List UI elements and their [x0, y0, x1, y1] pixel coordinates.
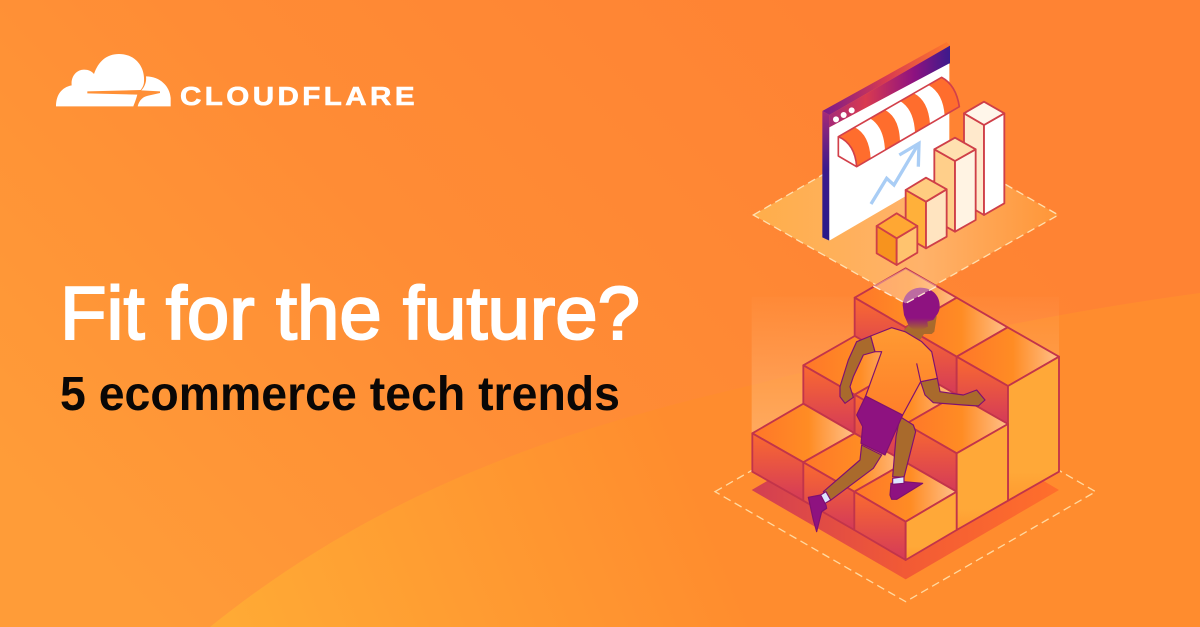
- dashed platform: [753, 127, 1058, 302]
- rear leg: [823, 445, 882, 501]
- illustration: staircase with runner: [715, 268, 1096, 602]
- bar 2: [906, 178, 947, 248]
- bar chart: [877, 102, 1004, 265]
- right arm: [921, 378, 985, 406]
- shirt: [866, 328, 937, 415]
- awning: [838, 77, 959, 167]
- shorts: [857, 396, 903, 455]
- illustration: storefront platform: [753, 42, 1058, 302]
- bar 3: [934, 138, 976, 232]
- socks: [821, 477, 904, 503]
- logo: Cloudflare: [56, 54, 418, 111]
- hair: [903, 288, 940, 330]
- left arm: [840, 336, 875, 403]
- title: Fit for the future?: [60, 271, 640, 355]
- glass tile: [873, 268, 937, 303]
- icon: cloud: [56, 54, 171, 106]
- shoes: [808, 482, 923, 532]
- dashed ground outline: [715, 382, 1096, 602]
- face: [903, 303, 937, 340]
- light beam: [752, 297, 1059, 437]
- stairs: [752, 268, 1059, 560]
- browser window: [822, 42, 950, 241]
- bar 1: [877, 213, 917, 265]
- ground shadow: [752, 400, 1059, 579]
- subtitle: 5 ecommerce tech trends: [60, 368, 620, 421]
- bar 4: [964, 102, 1004, 215]
- runner: [808, 288, 985, 532]
- front leg: [893, 417, 916, 477]
- logo wordmark: CLOUDFLARE: [180, 81, 418, 111]
- icon: rising arrow: [871, 143, 919, 204]
